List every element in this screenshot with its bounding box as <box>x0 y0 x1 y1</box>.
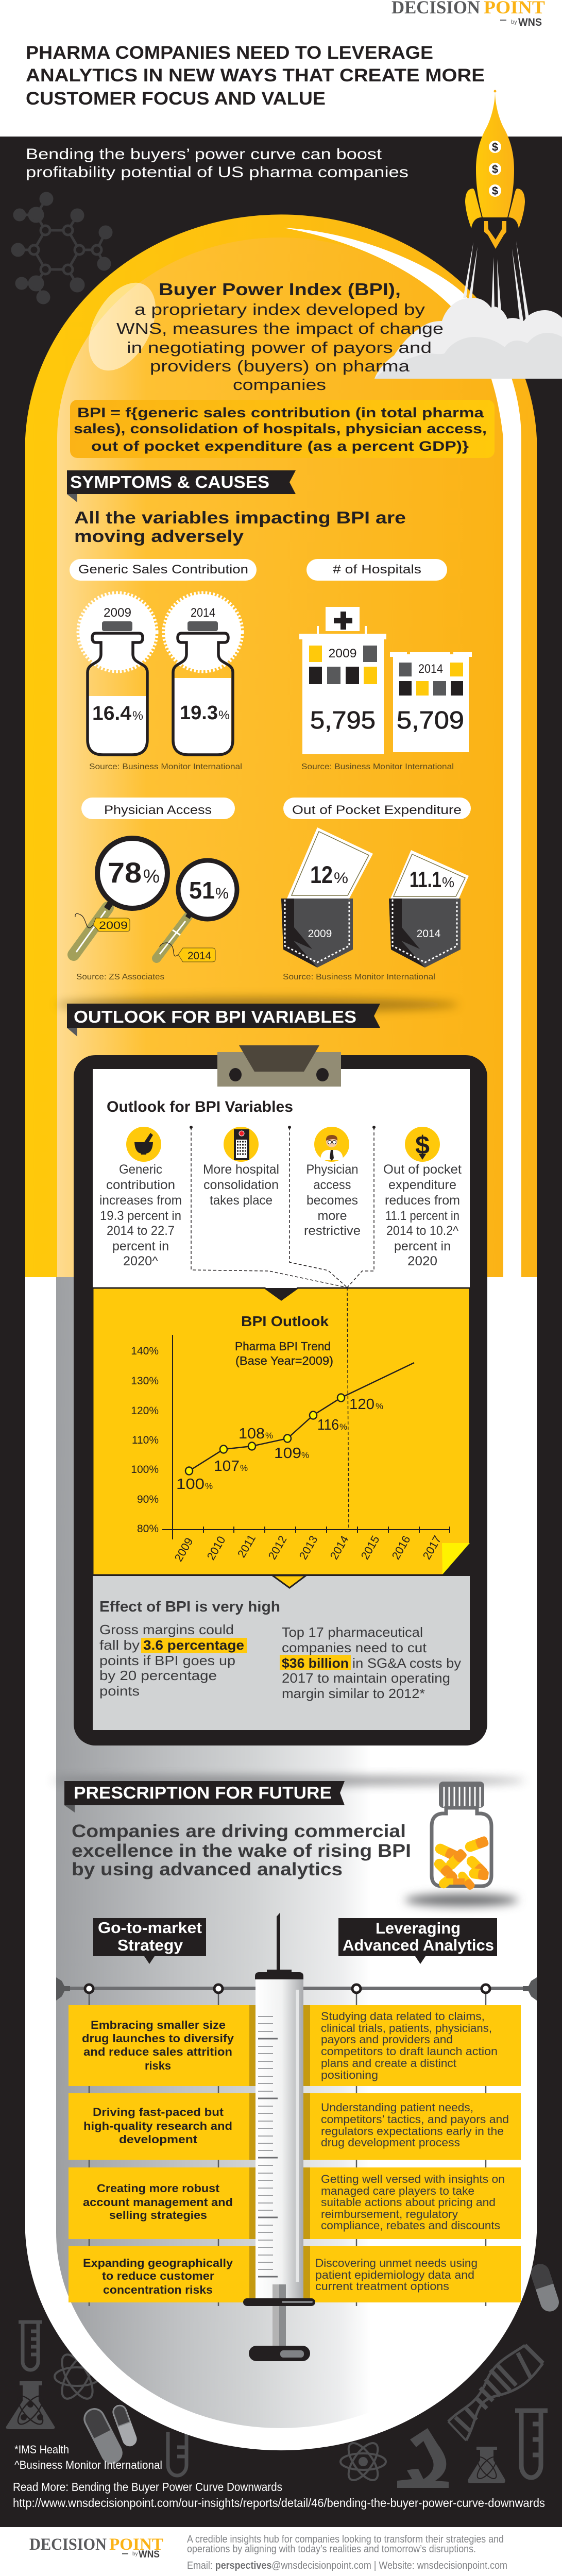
pocket 2009: % <box>334 870 348 887</box>
pocket 2014: 2014 <box>417 928 441 940</box>
data labels: 107 <box>214 1458 240 1475</box>
footnotes: ^Business Monitor International <box>14 2459 162 2471</box>
icon: rocket: $ <box>492 141 498 154</box>
icon: rocket: $ <box>492 184 498 197</box>
magnifier 2009: 78 <box>108 856 142 889</box>
footer logo: DECISION <box>29 2535 107 2554</box>
hospital 2014: 5,709 <box>397 707 464 734</box>
icon: test tube left <box>19 2322 42 2370</box>
bottle 2014: 2014 <box>191 606 215 620</box>
icon: dollar arrow <box>405 1127 440 1162</box>
item: patient needs: regulators expectations early in the <box>321 2125 504 2138</box>
item: account management: selling strategies <box>109 2209 207 2222</box>
panel: out of pocket expenditure <box>281 798 471 981</box>
item: smaller launches <box>69 2005 256 2086</box>
heading: variables moving adversely: All the variables impacting BPI are <box>74 508 406 527</box>
read more link <box>13 2480 545 2510</box>
footer logo: by <box>132 2551 138 2557</box>
fins <box>465 189 525 228</box>
label: leveraging advanced analytics: Leveraging <box>376 1919 461 1937</box>
variable: generic contribution: contribution <box>106 1178 175 1192</box>
effect of BPI: Effect of BPI is very high <box>99 1599 280 1615</box>
variable: hospital consolidation: consolidation <box>203 1178 279 1192</box>
variable: out of pocket: expenditure <box>388 1178 456 1192</box>
dashed connectors <box>190 1126 376 1529</box>
data labels <box>176 1396 383 1493</box>
x axis labels <box>172 1532 444 1564</box>
x axis labels: 2014 <box>328 1533 351 1562</box>
pill label <box>306 559 447 581</box>
thumb press <box>249 2346 310 2361</box>
gross margin text <box>99 1622 247 1699</box>
BPI formula box <box>70 400 495 458</box>
variable: physician access: becomes <box>306 1193 358 1208</box>
magnifier 2014 <box>157 860 237 962</box>
hospital 2009: 2009 <box>329 647 356 660</box>
background science icons <box>6 2262 561 2488</box>
trend line <box>189 1363 414 1471</box>
icon: capsule large <box>80 2404 126 2467</box>
gross margin text: 3.6 percentage <box>143 1637 244 1653</box>
item: research and development: high-quality research and <box>83 2120 232 2132</box>
bottle 2009: % <box>132 709 143 723</box>
cost cutting text: in SG&A costs by <box>352 1655 461 1671</box>
grey lower inner shape <box>56 1277 505 2428</box>
pocket 2014: 11.1 <box>410 867 441 892</box>
y axis labels: 90% <box>137 1494 159 1505</box>
variable: generic contribution: 2020^ <box>123 1254 158 1268</box>
magnifier 2009: % <box>143 866 160 887</box>
axes <box>162 1335 450 1539</box>
item: managed care insights: compliance, rebates and discounts <box>321 2219 500 2232</box>
item: studying data: payors and providers and <box>321 2033 453 2046</box>
panel: physician access <box>74 798 237 981</box>
cost cutting text: margin similar to 2012* <box>282 1686 425 1701</box>
x axis labels: 2017 <box>420 1533 444 1562</box>
footnotes <box>14 2443 162 2471</box>
footer description: A credible insights hub for companies looking to transform their strategies and <box>187 2534 504 2545</box>
variable: out of pocket: 2014 to 10.2^ <box>386 1224 458 1238</box>
item: account management <box>69 2167 256 2239</box>
read more link: http://www.wnsdecisionpoint.com/our-insights/reports/detail/46/bending-the-buyer-power-curve-downwards <box>13 2496 545 2510</box>
data labels: % <box>301 1450 309 1460</box>
bottle 2014 <box>164 593 242 755</box>
variable: generic contribution: 19.3 percent in <box>100 1209 181 1223</box>
item: smaller launches: Embracing smaller size <box>91 2019 226 2031</box>
footer logo <box>29 2535 163 2560</box>
hospital 2009: 5,795 <box>310 707 376 734</box>
gross margin text: fall by <box>99 1637 140 1653</box>
BPI definition text: in negotiating power of payors and <box>127 338 432 357</box>
variable: hospital consolidation <box>203 1127 279 1208</box>
item: studying data <box>303 2005 521 2086</box>
variable: out of pocket: 11.1 percent in <box>385 1209 459 1223</box>
x axis labels: 2009 <box>172 1535 196 1564</box>
shadow above ribbon <box>57 997 458 1012</box>
highlight on dome <box>75 272 169 382</box>
variable: physician access: access <box>313 1178 351 1192</box>
magnifier 2009 <box>74 838 167 955</box>
yellow inner panel <box>57 238 503 1277</box>
heading: commercial excellence: by using advanced analytics <box>72 1859 343 1879</box>
variable: out of pocket: 2020 <box>407 1254 437 1268</box>
icon: test tube right <box>515 2411 548 2478</box>
white swoosh <box>283 228 521 1277</box>
dog ear <box>442 1543 470 1574</box>
item: managed care insights: Getting well versed with insights on <box>321 2173 505 2185</box>
heading: commercial excellence: Companies are driving commercial <box>72 1821 406 1841</box>
variable: out of pocket: percent in <box>394 1239 451 1253</box>
header logo: by <box>511 19 517 25</box>
read more link: Read More: Bending the Buyer Power Curve Downwards <box>13 2480 282 2494</box>
footer description: Email: perspectives@wnsdecisionpoint.com | Website: wnsdecisionpoint.com <box>187 2560 507 2571</box>
variable: out of pocket: reduces from <box>385 1193 460 1208</box>
variable: out of pocket <box>383 1127 462 1268</box>
gross margin text: points if BPI goes up <box>99 1653 235 1668</box>
bottle 2009 <box>78 593 157 755</box>
exhaust streaks <box>463 241 530 321</box>
clipboard <box>74 1045 487 1745</box>
label: go-to-market strategy: Strategy <box>117 1936 183 1954</box>
variable: hospital consolidation: More hospital <box>203 1162 279 1177</box>
title: ANALYTICS IN NEW WAYS THAT CREATE MORE <box>26 65 485 86</box>
bottle 2009: 16.4 <box>92 703 131 724</box>
variable: physician access <box>304 1127 361 1238</box>
section ribbon: prescription <box>64 1781 345 1812</box>
label: go-to-market strategy <box>93 1918 206 1964</box>
icon: microscope <box>397 2428 449 2488</box>
white sheet <box>93 1069 470 1288</box>
x axis labels: 2010 <box>205 1534 228 1562</box>
item: smaller launches: risks <box>145 2059 171 2072</box>
icon: atom left <box>55 2350 100 2403</box>
icon: syringe <box>243 1912 315 2361</box>
source: Source: Business Monitor International <box>89 762 242 771</box>
hub <box>267 1970 292 1974</box>
icon: capsule small <box>110 2403 139 2448</box>
variable: physician access: restrictive <box>304 1224 361 1238</box>
section ribbon: outlook: OUTLOOK FOR BPI VARIABLES <box>74 1007 356 1026</box>
icon: dna helix <box>448 2345 543 2441</box>
heading: commercial excellence: excellence in the wake of rising BPI <box>72 1841 411 1861</box>
data labels: % <box>339 1422 347 1432</box>
panel: number of hospitals <box>299 559 472 771</box>
line chart: BPI outlook: Pharma BPI Trend <box>235 1340 331 1353</box>
item: unmet needs: patient epidemiology data and <box>315 2268 474 2281</box>
yellow sheet <box>93 1288 470 1575</box>
subtitle: profitability potential of US pharma companies <box>26 164 408 181</box>
clouds <box>374 298 562 379</box>
line chart: BPI outlook: (Base Year=2009) <box>235 1354 333 1367</box>
cost cutting text: Top 17 pharmaceutical <box>282 1624 423 1640</box>
heading: Outlook for BPI Variables <box>107 1098 293 1115</box>
heading: variables moving adversely <box>74 508 406 546</box>
dollar signs <box>489 141 501 153</box>
item: managed care insights <box>303 2167 521 2239</box>
item: expanding geographically: Expanding geographically <box>83 2257 233 2269</box>
cost cutting text <box>280 1624 461 1701</box>
data labels: % <box>376 1401 383 1411</box>
item: research and development: development <box>119 2133 198 2146</box>
item: research and development <box>69 2093 256 2160</box>
bottle 2014: % <box>218 708 230 722</box>
gross margin text: Gross margins could <box>99 1622 234 1637</box>
shadow above prescription ribbon <box>52 1776 525 1785</box>
pill label <box>81 798 235 819</box>
footnotes: *IMS Health <box>14 2443 69 2456</box>
item: unmet needs: current treatment options <box>315 2280 449 2293</box>
item: account management: account management and <box>83 2196 233 2209</box>
y axis labels: 110% <box>132 1434 159 1446</box>
y axis labels: 100% <box>131 1464 159 1476</box>
item: studying data: positioning <box>321 2069 378 2081</box>
flame <box>484 221 506 249</box>
gross margin text: points <box>99 1683 140 1699</box>
BPI definition text: companies <box>233 376 326 394</box>
data points <box>185 1394 345 1475</box>
icon: pill jar <box>405 1782 518 1906</box>
line chart: BPI outlook <box>131 1313 450 1564</box>
plunger rod <box>273 2284 279 2346</box>
grey sheet <box>93 1576 470 1730</box>
heading: variables moving adversely: moving adversely <box>74 527 244 546</box>
panel: generic sales contribution <box>70 559 257 771</box>
variable: hospital consolidation: takes place <box>210 1193 273 1208</box>
pocket 2009: 2009 <box>308 928 332 940</box>
magnifier 2014: 51 <box>189 877 215 904</box>
icon: capsule right <box>529 2262 561 2314</box>
hospital 2014 <box>390 652 472 752</box>
pocket 2009 <box>281 827 373 968</box>
yellow upper dome <box>25 214 537 1277</box>
pill label: Physician Access <box>104 803 212 817</box>
heading: commercial excellence <box>72 1821 411 1879</box>
section ribbon: prescription: PRESCRIPTION FOR FUTURE <box>74 1783 332 1802</box>
y axis labels: 80% <box>137 1523 159 1535</box>
bottle 2009: 2009 <box>104 606 131 620</box>
section ribbon: outlook <box>67 1004 380 1037</box>
icon: flask right <box>468 2447 505 2483</box>
pocket 2009: 12 <box>310 861 333 888</box>
label: leveraging advanced analytics: Advanced Analytics <box>343 1936 494 1954</box>
source: Source: ZS Associates <box>76 973 164 981</box>
item: research and development: Driving fast-paced but <box>93 2106 224 2119</box>
x axis labels: 2013 <box>297 1533 320 1562</box>
effect of BPI <box>99 1599 461 1701</box>
BPI definition text: Buyer Power Index (BPI), <box>159 280 401 299</box>
pocket 2014 <box>389 850 469 968</box>
header logo: WNS <box>518 16 542 28</box>
section ribbon: symptoms and causes <box>67 470 296 502</box>
hanging rail <box>56 1977 537 2306</box>
item: expanding geographically: to reduce customer <box>102 2269 214 2282</box>
cost cutting text: companies need to cut <box>282 1640 427 1655</box>
variable: physician access: Physician <box>306 1162 359 1177</box>
title: CUSTOMER FOCUS AND VALUE <box>26 89 326 109</box>
data labels: % <box>240 1463 248 1473</box>
variable: generic contribution: increases from <box>99 1193 182 1208</box>
label: leveraging advanced analytics <box>338 1918 497 1964</box>
icon: atom right <box>340 2438 386 2485</box>
white lower dome <box>25 1277 537 2450</box>
subtitle: Bending the buyers’ power curve can boost <box>26 146 382 163</box>
y axis labels <box>131 1345 159 1535</box>
item: patient needs: drug development process <box>321 2136 460 2149</box>
icon: flask left <box>6 2381 55 2429</box>
icon: mortar <box>126 1127 161 1162</box>
section ribbon: symptoms and causes: SYMPTOMS & CAUSES <box>70 472 269 492</box>
item: expanding geographically: concentration risks <box>103 2283 213 2296</box>
item: patient needs: Understanding patient needs, <box>321 2101 473 2114</box>
BPI definition text: a proprietary index developed by <box>134 300 425 318</box>
icon: rocket <box>463 90 530 321</box>
data labels: 120 <box>349 1396 374 1413</box>
item: patient needs <box>303 2093 521 2160</box>
board <box>74 1055 487 1745</box>
body <box>476 91 514 217</box>
icon: molecule <box>12 193 111 303</box>
footer logo: WNS <box>139 2549 160 2560</box>
source: Source: Business Monitor International <box>301 762 454 771</box>
magnifier 2014: % <box>215 885 229 902</box>
variable: generic contribution <box>99 1127 182 1268</box>
y axis labels: 120% <box>131 1405 159 1417</box>
data labels: % <box>265 1431 273 1440</box>
item: patient needs: competitors’ tactics, and payors and <box>321 2113 509 2126</box>
graduation marks <box>258 2016 273 2269</box>
variable: generic contribution: Generic <box>119 1162 162 1177</box>
pill label <box>70 559 257 581</box>
pill label <box>283 798 471 819</box>
x axis labels: 2011 <box>235 1532 258 1560</box>
item: unmet needs: Discovering unmet needs using <box>315 2257 478 2269</box>
BPI definition text: WNS, measures the impact of change <box>116 319 444 337</box>
header logo <box>391 0 545 28</box>
item: studying data: Studying data related to claims, <box>321 2010 485 2023</box>
y axis labels: 130% <box>131 1375 159 1387</box>
item: expanding geographically <box>69 2246 256 2302</box>
chart title: BPI Outlook <box>241 1313 329 1329</box>
label: go-to-market strategy: Go-to-market <box>98 1919 202 1937</box>
clip <box>217 1045 341 1087</box>
item: studying data: clinical trials, patients, physicians, <box>321 2022 492 2035</box>
cost cutting text: 2017 to maintain operating <box>282 1670 450 1686</box>
variable: generic contribution: percent in <box>112 1239 169 1253</box>
flange <box>243 2298 315 2306</box>
data labels: 109 <box>274 1445 301 1462</box>
needle <box>277 1912 280 1970</box>
hospital 2009 <box>299 607 386 754</box>
x axis labels: 2012 <box>266 1533 289 1562</box>
magnifier 2014: 2014 <box>188 950 211 962</box>
BPI definition text: providers (buyers) on pharma <box>150 357 410 375</box>
data labels: 116 <box>317 1417 339 1433</box>
bottle 2014: 19.3 <box>180 702 218 724</box>
variable: out of pocket: Out of pocket <box>383 1162 462 1177</box>
x axis labels: 2016 <box>389 1533 413 1562</box>
subtitle <box>26 146 408 181</box>
item: smaller launches: drug launches to diversify <box>82 2032 234 2045</box>
gross margin text: by 20 percentage <box>99 1668 217 1683</box>
pill label: # of Hospitals <box>333 563 421 577</box>
item: managed care insights: suitable actions about pricing and <box>321 2196 496 2209</box>
jar shadow <box>405 1894 518 1906</box>
item: smaller launches: and reduce sales attrition <box>83 2045 232 2058</box>
footer description <box>187 2534 507 2571</box>
panel: advanced analytics items <box>303 2005 521 2302</box>
source: Source: Business Monitor International <box>283 973 435 981</box>
x axis labels: 2015 <box>359 1533 382 1562</box>
BPI formula box: out of pocket expenditure (as a percent GDP)} <box>91 438 469 454</box>
icon: rocket: $ <box>492 163 498 176</box>
icon: hospital <box>224 1127 259 1162</box>
BPI formula box: BPI = f{generic sales contribution (in total pharma <box>77 405 484 420</box>
title: PHARMA COMPANIES NEED TO LEVERAGE <box>26 43 433 63</box>
item: account management: Creating more robust <box>97 2182 220 2195</box>
data labels: 100 <box>176 1476 205 1493</box>
title <box>26 43 485 109</box>
cost cutting text: $36 billion <box>282 1655 349 1671</box>
BPI definition text <box>116 280 444 394</box>
footer logo: POINT <box>109 2535 163 2554</box>
data labels: 108 <box>239 1426 265 1442</box>
item: studying data: competitors to draft launch action <box>321 2045 498 2058</box>
pill label: Out of Pocket Expenditure <box>292 803 462 817</box>
item: unmet needs <box>303 2246 521 2302</box>
item: managed care insights: reimbursement, regulatory <box>321 2208 458 2221</box>
variable: physician access: more <box>317 1209 347 1223</box>
data labels: % <box>205 1481 213 1491</box>
item: managed care insights: managed care players to take <box>321 2184 474 2197</box>
panel: go-to-market items <box>69 2005 256 2302</box>
pill label: Generic Sales Contribution <box>78 563 248 577</box>
BPI formula box: sales), consolidation of hospitals, physician access, <box>74 421 487 436</box>
variable: generic contribution: 2014 to 22.7 <box>107 1224 175 1238</box>
barrel <box>256 1979 303 2298</box>
item: studying data: plans and create a distinct <box>321 2057 456 2070</box>
magnifier 2009: 2009 <box>99 920 128 931</box>
icon: test tube middle <box>168 2432 186 2476</box>
hospital 2014: 2014 <box>418 662 443 676</box>
icon: dollar arrow: $ <box>415 1131 430 1160</box>
footer description: operations by aligning with today’s realities and tomorrow’s disruptions. <box>187 2544 476 2555</box>
pocket 2014: % <box>442 874 454 890</box>
icon: doctor <box>314 1127 349 1162</box>
y axis labels: 140% <box>131 1345 159 1357</box>
